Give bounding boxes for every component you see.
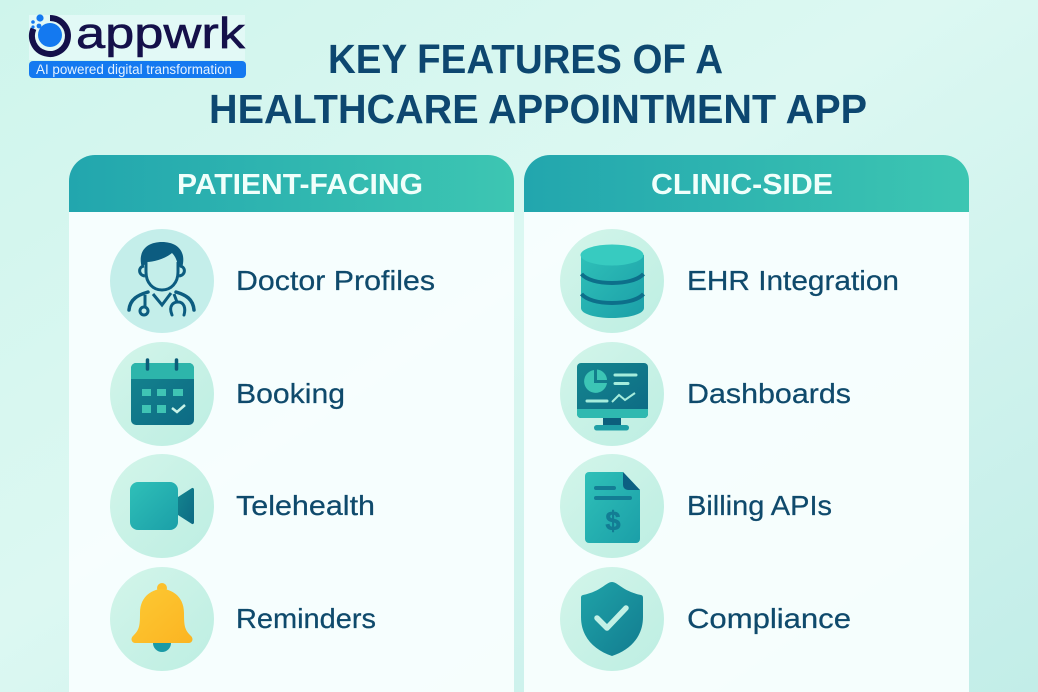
logo [29,9,246,78]
feature: dashboards [560,342,664,446]
header: clinic-side [524,155,969,212]
logo: AI powered digital transformation [36,62,232,77]
feature: doctor profiles [110,229,214,333]
label: dashboards: Dashboards [687,378,851,409]
feature: reminders [110,567,214,671]
feature: compliance [560,567,664,671]
header: patient-facing [69,155,514,212]
label: EHR integration: EHR Integration [687,265,899,296]
feature: telehealth [110,454,214,558]
label: booking: Booking [236,378,345,409]
label: billing APIs: Billing APIs [687,490,832,521]
title [209,36,867,132]
header: patient-facing: PATIENT-FACING [177,169,423,201]
feature: EHR integration [560,229,664,333]
panel: patient-facing [69,155,514,692]
feature: billing APIs: $ [605,506,621,536]
logo: appwrk [76,9,246,58]
title: HEALTHCARE APPOINTMENT APP [209,86,867,132]
label: reminders: Reminders [236,603,376,634]
feature: booking [110,342,214,446]
label: doctor profiles: Doctor Profiles [236,265,435,296]
header: clinic-side: CLINIC-SIDE [651,169,833,201]
label: compliance: Compliance [687,603,851,634]
title: KEY FEATURES OF A [328,36,723,82]
feature: billing APIs [560,454,664,558]
panel: clinic-side [524,155,969,692]
label: telehealth: Telehealth [236,490,375,521]
